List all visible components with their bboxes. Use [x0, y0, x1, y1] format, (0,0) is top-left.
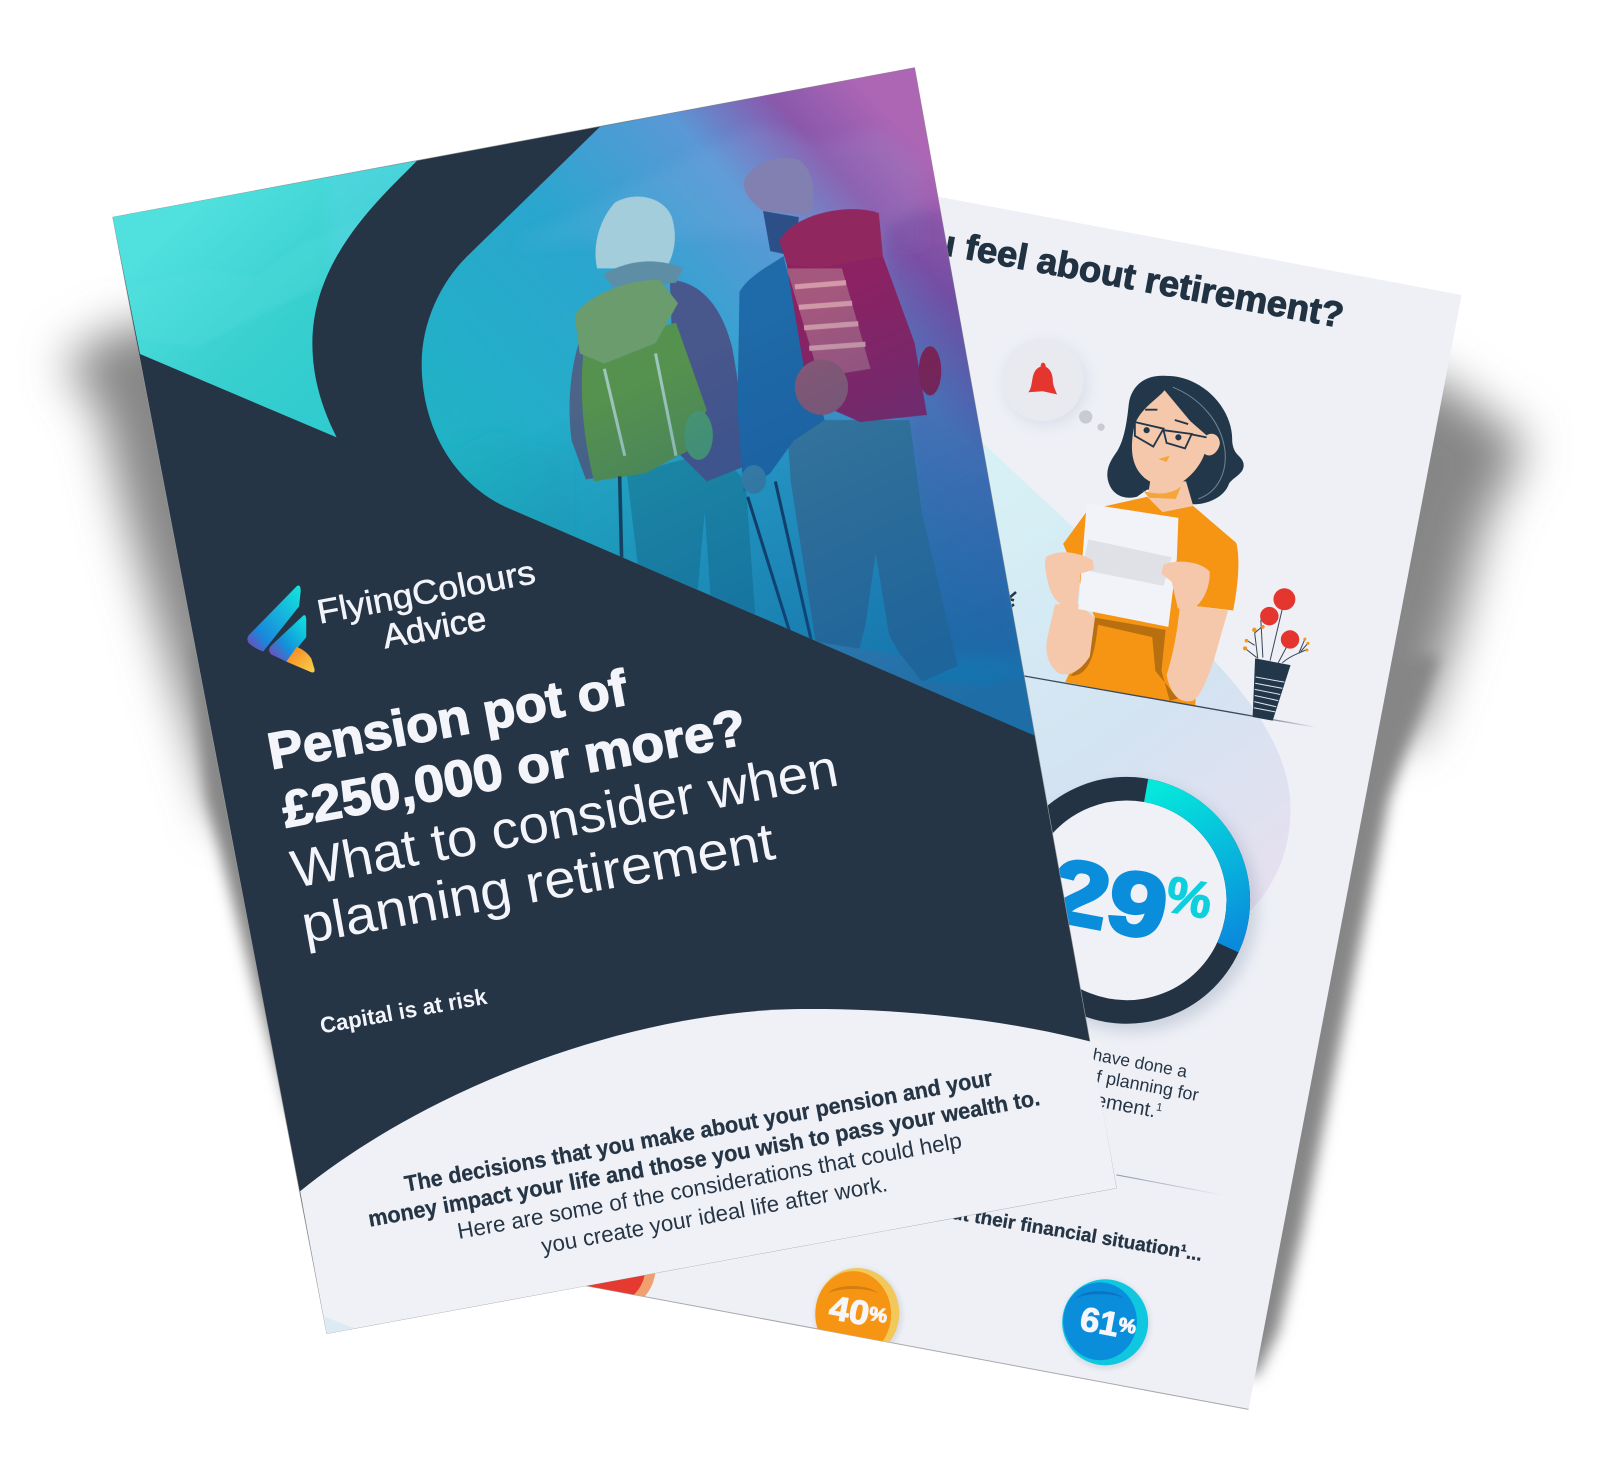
logo: wing mark — [247, 585, 315, 673]
panel: back page — [569, 188, 1462, 1409]
icon: bell thought bubble — [1002, 339, 1105, 431]
chart: 29 percent donut — [1008, 783, 1258, 1032]
title — [263, 659, 843, 955]
divider line — [1116, 1175, 1224, 1195]
chart: 29 percent donut: 29 — [1042, 839, 1175, 960]
badge: 40 percent — [814, 1268, 903, 1343]
title: planning retirement — [297, 812, 779, 955]
hiker: man — [737, 158, 958, 684]
leaf fragment at page fold — [1002, 592, 1016, 610]
text: donut caption: retirement. — [1060, 1083, 1157, 1122]
teal mountain corner — [112, 161, 417, 438]
text: donut caption: 1 — [1155, 1101, 1163, 1114]
badge: 61 percent: % — [1117, 1314, 1138, 1339]
photo: two hikers with gradient overlay — [422, 68, 1034, 736]
stat badges — [587, 1268, 1151, 1370]
title: What to consider when — [286, 739, 843, 900]
shadow: front page — [64, 307, 348, 1147]
title: Pension pot of — [263, 659, 632, 780]
text: intro: money impact your life and those you wish to pass your wealth to. — [366, 1085, 1042, 1232]
panel: front page — [102, 51, 1116, 1334]
badge: 40 percent: % — [867, 1303, 889, 1328]
badge: 40 percent: 40 — [826, 1289, 870, 1333]
chart: 29 percent donut: % — [1162, 865, 1217, 930]
logo: wordmark: Advice — [380, 599, 489, 656]
rocky ground — [813, 641, 1034, 732]
text: donut caption: have done a — [1091, 1044, 1189, 1082]
text: intro: Here are some of the considerations that could help — [455, 1128, 964, 1244]
icon: vase with flowers — [1243, 588, 1309, 721]
text: intro: The decisions that you make about your pension and your — [402, 1065, 995, 1197]
badge: red partly hidden — [587, 1274, 656, 1297]
text: donut caption — [1060, 1044, 1200, 1123]
logo: wordmark: FlyingColours — [314, 553, 538, 632]
illustration: woman holding letter — [1045, 376, 1244, 707]
mountains — [483, 139, 1018, 652]
table line — [1024, 676, 1316, 727]
heading: how do you feel about retirement: How do you feel about retirement? — [748, 188, 1347, 336]
shadow: back page — [1178, 374, 1526, 1378]
badge: 61 percent: 61 — [1077, 1300, 1121, 1344]
badge: 61 percent — [1062, 1279, 1150, 1369]
logo: wordmark — [314, 553, 538, 656]
text: donut caption: of planning for — [1085, 1064, 1200, 1105]
text: capital at risk: Capital is at risk — [318, 984, 489, 1038]
text: intro: you create your ideal life after work. — [539, 1171, 889, 1259]
pale blue background shape — [953, 415, 1291, 1024]
darker lower gradient — [493, 282, 1034, 736]
title: £250,000 or more? — [278, 698, 750, 838]
text: financial situation subheading: about their financial situation¹... — [916, 1197, 1204, 1266]
hiker: woman — [570, 197, 756, 625]
light bottom curve — [300, 1009, 1116, 1334]
